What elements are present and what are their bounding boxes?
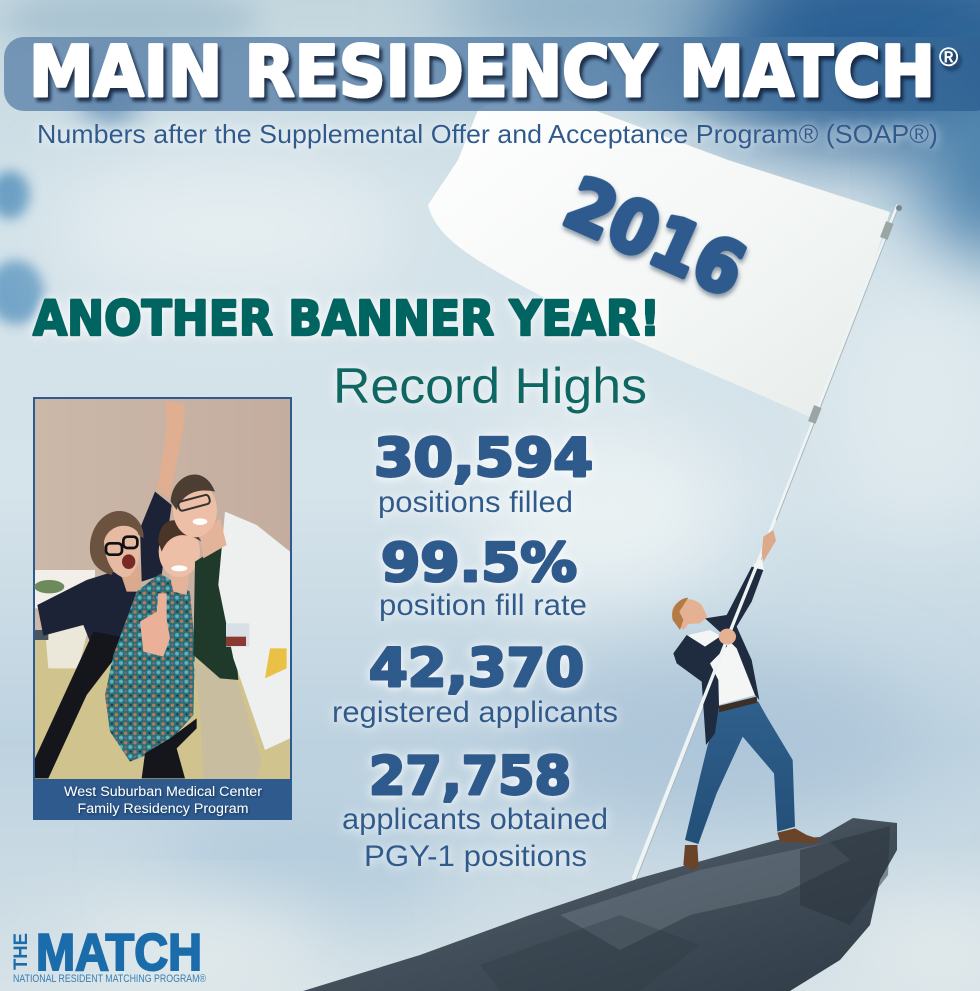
belt — [718, 697, 757, 712]
man pulling the flag pole — [633, 520, 820, 878]
jeans — [685, 702, 795, 844]
rocky cliff — [303, 818, 897, 991]
stat: registered applicants — [332, 638, 618, 729]
pole over figure — [633, 520, 775, 878]
title: MAIN RESIDENCY MATCH — [29, 31, 935, 113]
flag with pole — [428, 83, 902, 890]
stat: registered applicants: 42,370 — [369, 638, 584, 699]
photo caption — [64, 784, 263, 816]
stat: applicants obtained positions: applicants obtained — [342, 803, 608, 836]
photo caption: Family Residency Program — [78, 801, 248, 816]
stat: position fill rate: position fill rate — [379, 589, 587, 622]
subtitle: Numbers after the Supplemental Offer and Acceptance Program® (SOAP®) — [37, 119, 938, 149]
shirt — [688, 630, 755, 705]
flag year 2016: 2016 — [553, 161, 757, 313]
stat: positions filled: 30,594 — [374, 428, 593, 489]
stat: positions filled: positions filled — [378, 486, 573, 519]
stat: positions filled — [374, 428, 593, 519]
stat: registered applicants: registered applicants — [332, 696, 618, 729]
stat: position fill rate — [379, 533, 587, 622]
left shoe — [683, 845, 699, 870]
NRMP logo: NATIONAL RESIDENT MATCHING PROGRAM® — [13, 973, 206, 985]
jacket — [673, 635, 727, 745]
stat: applicants obtained positions: 27,758 — [369, 746, 571, 807]
head — [672, 599, 707, 630]
headline: ANOTHER BANNER YEAR! — [33, 291, 660, 347]
photo of three residents — [34, 399, 290, 779]
stat: applicants obtained positions: PGY-1 positions — [364, 840, 587, 873]
subheading record highs: Record Highs — [333, 358, 647, 414]
lower fist — [719, 629, 736, 645]
photo caption: West Suburban Medical Center — [64, 784, 263, 799]
title: ® — [939, 42, 958, 72]
stat: applicants obtained positions — [342, 746, 608, 873]
NRMP logo: THE — [11, 933, 32, 970]
title band — [4, 37, 980, 111]
shirt cuff — [753, 559, 764, 570]
upper fist — [762, 530, 776, 562]
NRMP logo: MATCH — [36, 924, 202, 982]
stat: position fill rate: 99.5% — [381, 533, 577, 594]
photo panel — [33, 397, 292, 820]
right shoe — [777, 828, 820, 843]
